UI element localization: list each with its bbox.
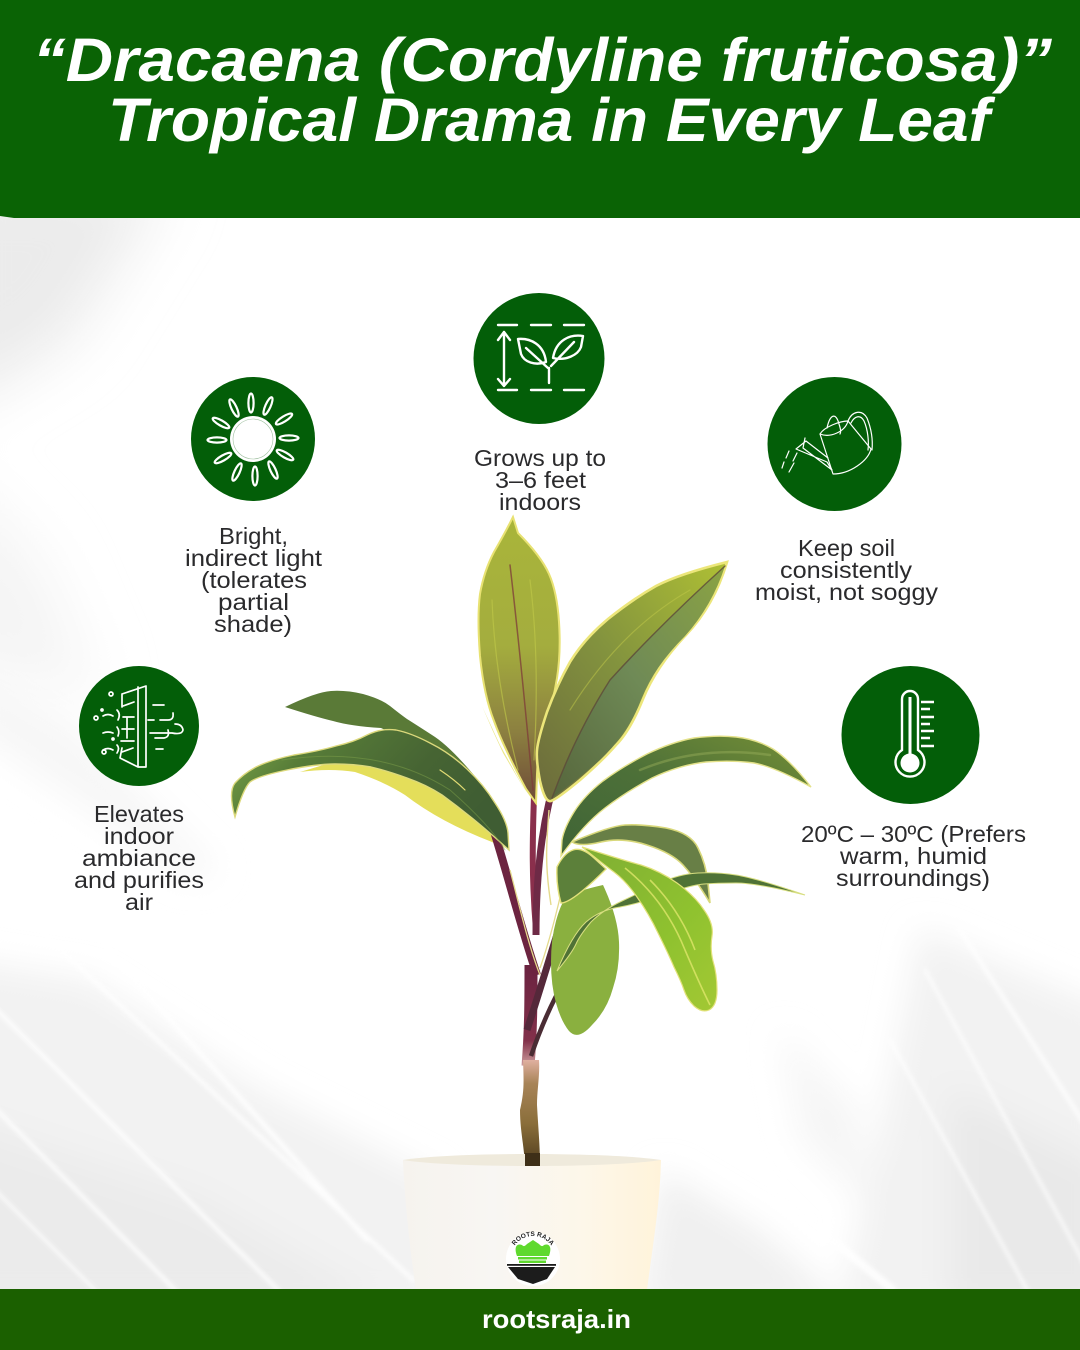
leaf: central pale flap xyxy=(482,706,526,792)
feature: air xyxy=(74,666,204,915)
pot xyxy=(403,1153,661,1289)
label: temperature: surroundings) xyxy=(836,865,990,891)
label: temperature xyxy=(801,821,1026,891)
icon: sun xyxy=(191,377,315,501)
feature: light xyxy=(185,377,323,637)
feature: temperature xyxy=(801,666,1026,891)
feature: water xyxy=(755,377,939,605)
label: air: air xyxy=(125,889,153,915)
icon: plant height xyxy=(474,293,604,424)
leaf: lower hanging xyxy=(551,885,619,1035)
pot logo badge xyxy=(506,1231,560,1286)
leaf: upper right dark half xyxy=(552,566,725,798)
label: light: Bright, xyxy=(219,523,288,549)
label: water: Keep soil xyxy=(798,535,895,561)
leaf: back upper left xyxy=(285,691,478,780)
footer bar xyxy=(0,1289,1080,1350)
header banner xyxy=(0,0,1080,218)
label: air xyxy=(74,801,204,915)
icon: air purifier xyxy=(79,666,199,786)
label: light xyxy=(185,523,323,637)
leaf: central tall xyxy=(478,517,560,803)
label: light: indirect light xyxy=(185,545,323,571)
label: air: ambiance xyxy=(82,845,196,871)
label: height xyxy=(474,445,606,515)
leaf: upper right xyxy=(537,562,727,801)
label: water xyxy=(755,535,939,605)
label: air: and purifies xyxy=(74,867,204,893)
label: air: indoor xyxy=(104,823,174,849)
label: light: (tolerates xyxy=(201,567,307,593)
plant xyxy=(232,517,811,1166)
trunk xyxy=(520,1060,540,1166)
title xyxy=(33,26,1053,154)
leaf: thin right xyxy=(557,873,805,971)
label: height: indoors xyxy=(499,489,581,515)
leaf: front light green drooping xyxy=(582,847,717,1011)
pot logo badge: ROOTS RAJA xyxy=(512,1231,554,1246)
feature: height xyxy=(474,293,606,515)
leaf: short inner xyxy=(557,849,606,903)
stems xyxy=(492,770,590,1066)
leaf veins xyxy=(282,565,770,850)
leaf: back right dark xyxy=(572,825,710,903)
leaf: yellow underside left xyxy=(300,760,505,848)
leaf: right middle xyxy=(561,736,811,856)
label: water: moist, not soggy xyxy=(755,579,939,605)
title: “Dracaena (Cordyline fruticosa)” xyxy=(33,26,1053,94)
leaf: large left xyxy=(232,730,509,850)
label: height: 3–6 feet xyxy=(495,467,587,493)
icon: watering can xyxy=(768,377,902,511)
leaf stripes xyxy=(625,868,710,1005)
label: light: shade) xyxy=(214,611,292,637)
label: temperature: warm, humid xyxy=(839,843,987,869)
label: height: Grows up to xyxy=(474,445,606,471)
label: air: Elevates xyxy=(94,801,184,827)
label: temperature: 20ºC – 30ºC (Prefers xyxy=(801,821,1026,847)
label: light: partial xyxy=(218,589,289,615)
title: Tropical Drama in Every Leaf xyxy=(108,86,996,154)
footer website: rootsraja.in xyxy=(482,1304,631,1334)
label: water: consistently xyxy=(780,557,913,583)
icon: thermometer xyxy=(842,666,980,804)
